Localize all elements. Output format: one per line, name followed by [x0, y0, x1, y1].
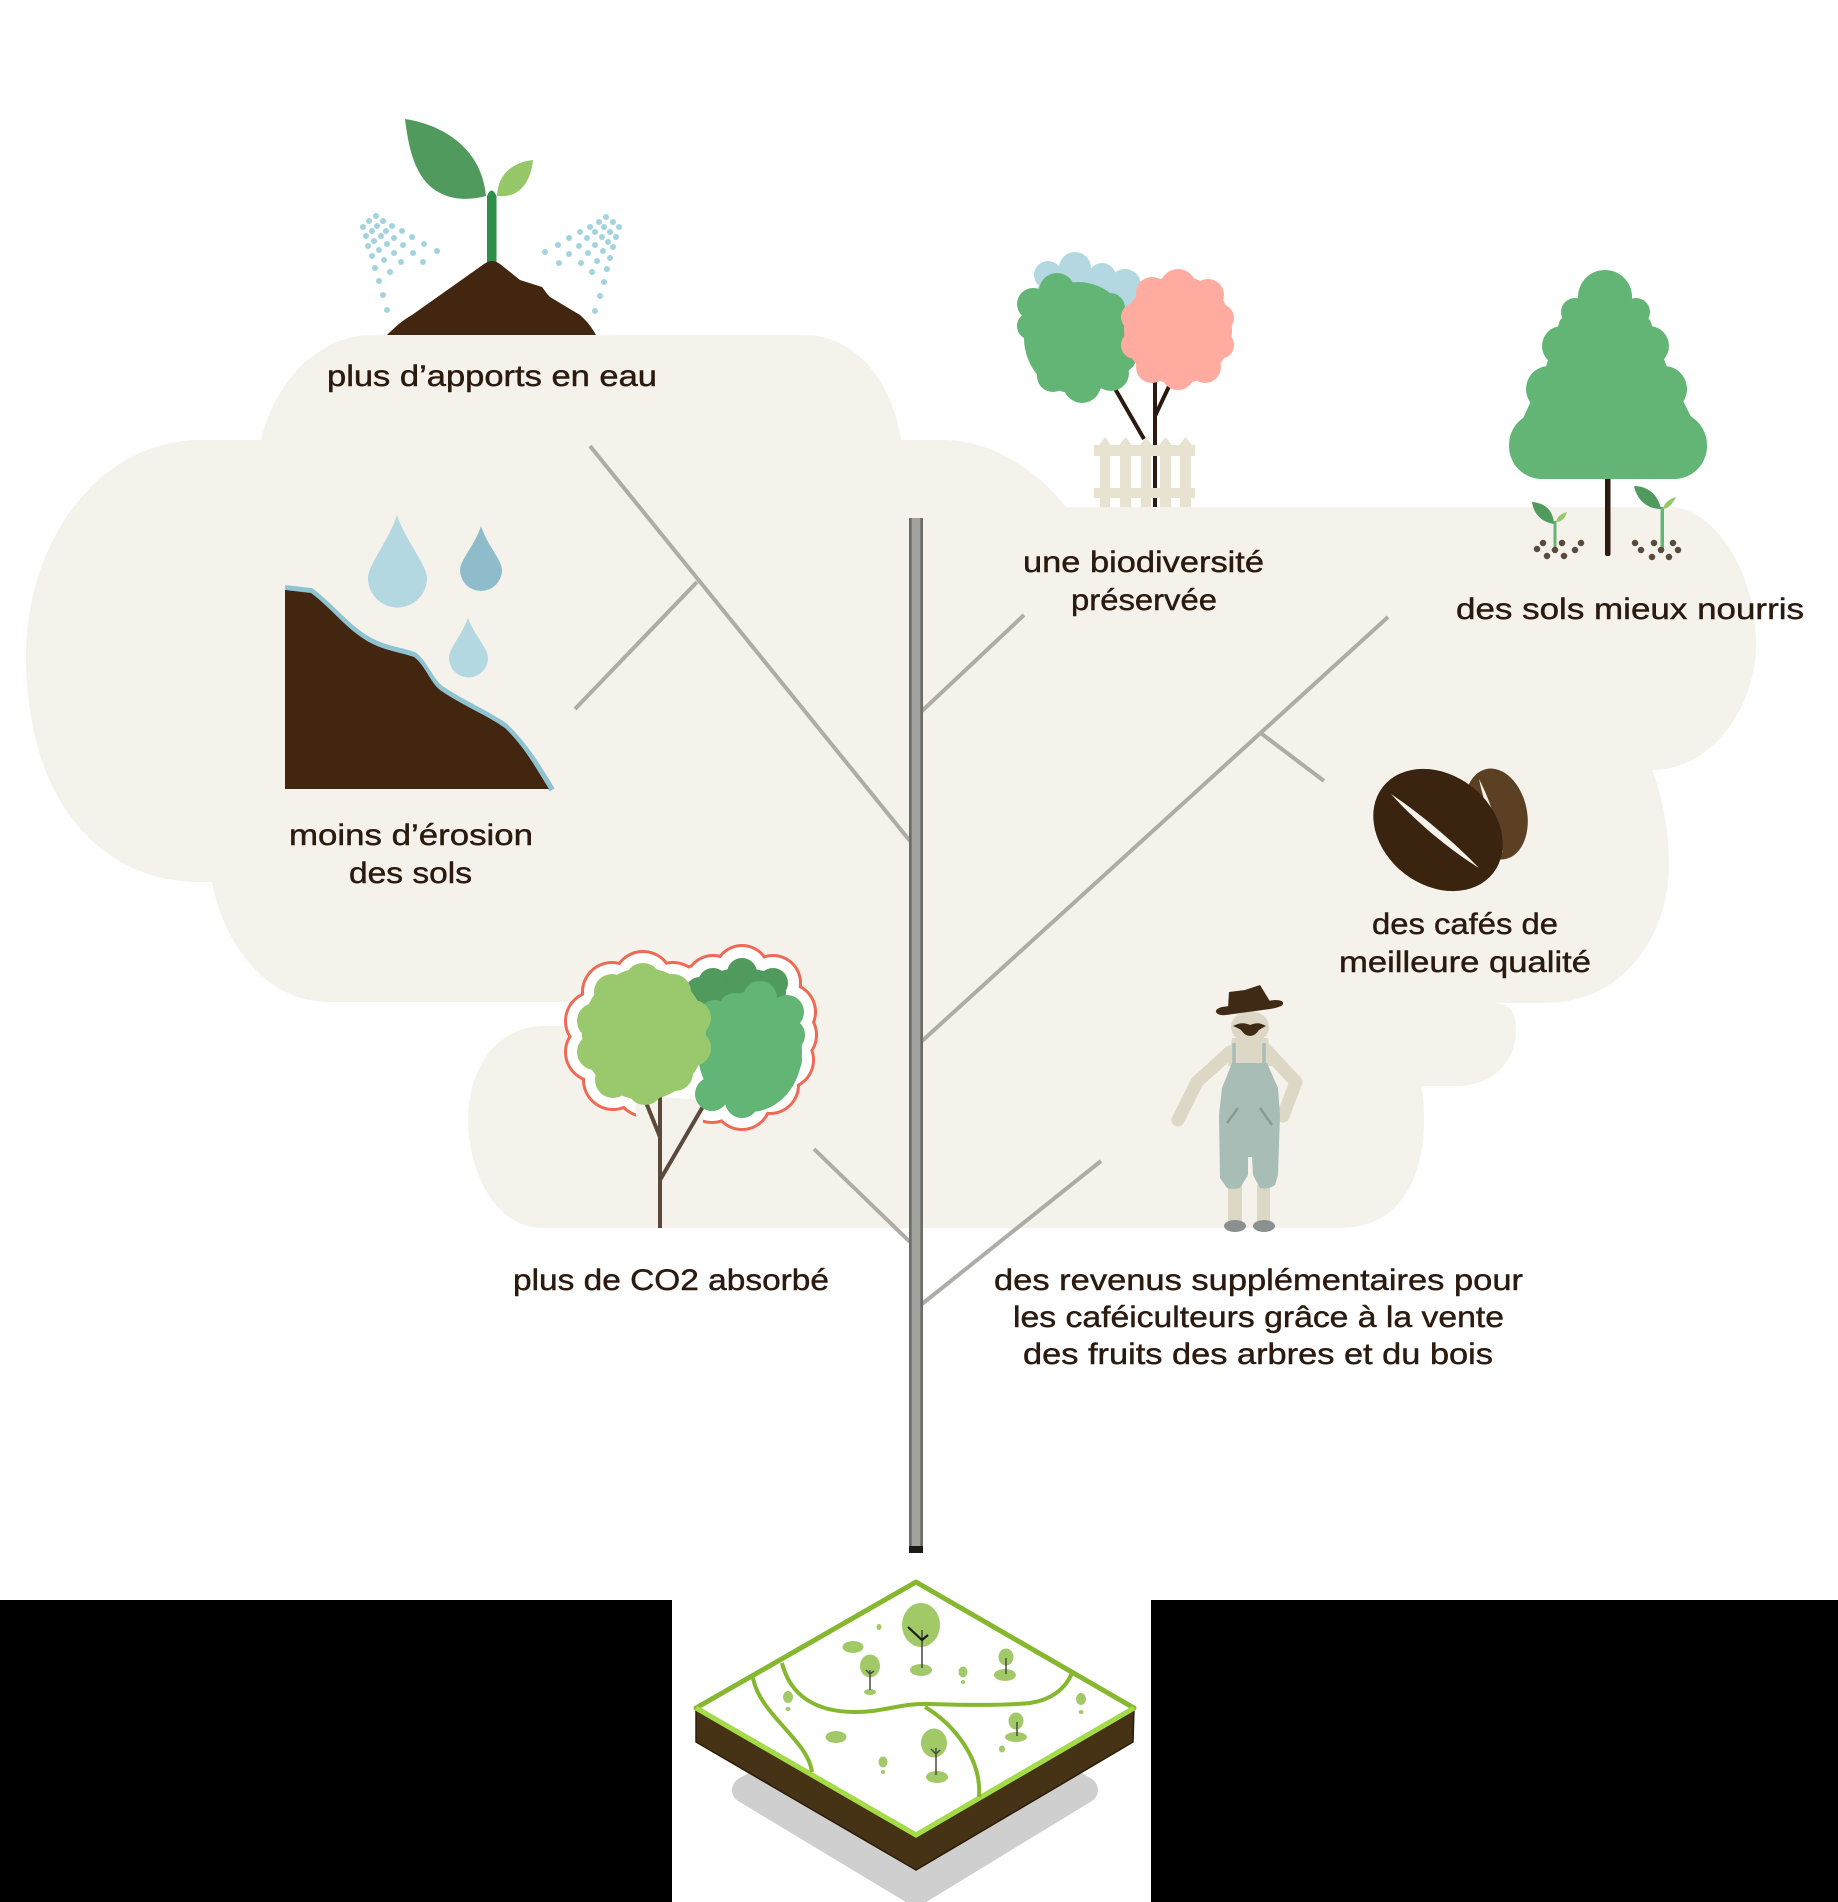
background cloud shape: [26, 335, 1756, 1228]
ground shadow: [745, 1690, 1085, 1893]
small leaf: [497, 160, 533, 196]
drop 2: [460, 526, 502, 591]
halo gap at the trunks: [636, 1095, 703, 1132]
shoes: [1224, 1220, 1275, 1232]
icon: seedling with water spray: [363, 119, 619, 335]
label: des revenus supplémentaires: [994, 1264, 1523, 1371]
label: des sols mieux nourris: des sols mieux nourris: [1456, 593, 1804, 626]
arms: [1178, 1050, 1296, 1120]
bottom black bands: [0, 1600, 1838, 1902]
neck and chest: [1228, 1038, 1272, 1066]
label: moins d'érosion des sols: [289, 819, 533, 890]
label: des revenus supplémentaires: des revenus supplémentaires pour: [994, 1264, 1523, 1297]
spray left: [363, 216, 437, 310]
label: plus d'apports en eau: plus d’apports en eau: [327, 360, 657, 393]
back bean slit: [1479, 779, 1503, 853]
overalls: [1219, 1063, 1280, 1189]
seedling right: [1634, 486, 1676, 551]
label: des cafés de meilleure qualité: des cafés de: [1372, 908, 1558, 941]
icon: coffee farmer: [1178, 985, 1296, 1232]
tree trunks: [1110, 375, 1172, 507]
large leaf: [405, 119, 486, 199]
hat: [1216, 985, 1283, 1015]
drop 3: [449, 618, 488, 678]
label: une biodiversité préservée: préservée: [1071, 584, 1217, 617]
pockets: [1227, 1108, 1272, 1125]
slope water edge: [285, 588, 552, 790]
soil dots: [1537, 543, 1678, 557]
icon: biodiversity trees and fence: [1017, 252, 1234, 507]
tree branches: [575, 446, 1388, 1304]
red halo: [595, 973, 788, 1101]
icon: eroded slope with water drops: [285, 515, 552, 790]
label: moins d'érosion des sols: moins d’érosion: [289, 819, 533, 852]
head: [1231, 1011, 1269, 1043]
green foliage: [1017, 273, 1136, 403]
front bean: [1349, 744, 1527, 916]
label: une biodiversité préservée: [1023, 546, 1264, 617]
tree trunk: [1605, 470, 1610, 556]
label: des revenus supplémentaires: les caféiculteurs grâce à la vente: [1013, 1301, 1504, 1334]
soil mound: [387, 261, 596, 335]
fence: [1094, 437, 1195, 507]
label: moins d'érosion des sols: des sols: [349, 857, 472, 890]
white halo: [595, 973, 788, 1101]
front bean slit: [1391, 794, 1479, 868]
green foliage: [698, 992, 802, 1112]
label: plus de CO2 absorbé: plus de CO2 absorbé: [513, 1264, 829, 1297]
bright lower edge: [696, 1708, 1134, 1835]
drop 1: [368, 515, 427, 608]
land surface: [696, 1582, 1134, 1835]
straps: [1234, 1043, 1264, 1065]
icon: coffee beans: [1349, 744, 1536, 916]
spray right: [545, 217, 619, 311]
stem: [487, 190, 496, 262]
label: des cafés de meilleure qualité: meilleure qualité: [1339, 946, 1591, 979]
back bean: [1456, 763, 1536, 865]
slope soil: [285, 590, 549, 789]
paths on the land: [753, 1663, 1072, 1797]
tree foliage: [1509, 270, 1707, 479]
pink foliage: [1121, 269, 1234, 390]
small trees: [783, 1603, 1086, 1774]
tree stems: [866, 1627, 1017, 1775]
moustache: [1233, 1023, 1266, 1036]
seedling left: [1532, 502, 1567, 552]
label: des revenus supplémentaires: des fruits des arbres et du bois: [1023, 1338, 1493, 1371]
lower legs: [1228, 1185, 1270, 1221]
dark green foliage: [698, 968, 786, 1016]
label: des cafés de meilleure qualité: [1339, 908, 1591, 979]
ground ovals: [826, 1641, 1027, 1783]
light green foliage: [582, 968, 706, 1100]
soil block: [696, 1708, 1134, 1870]
tree trunks: [645, 1090, 705, 1228]
icon: trees absorbing CO2: [582, 968, 802, 1228]
blue foliage: [1034, 252, 1141, 319]
icon: tree with seedlings and nutrients: [1509, 270, 1707, 557]
icon: isometric plot of land: [696, 1582, 1134, 1893]
central trunk: [909, 518, 923, 1553]
label: une biodiversité préservée: une biodiversité: [1023, 546, 1264, 579]
